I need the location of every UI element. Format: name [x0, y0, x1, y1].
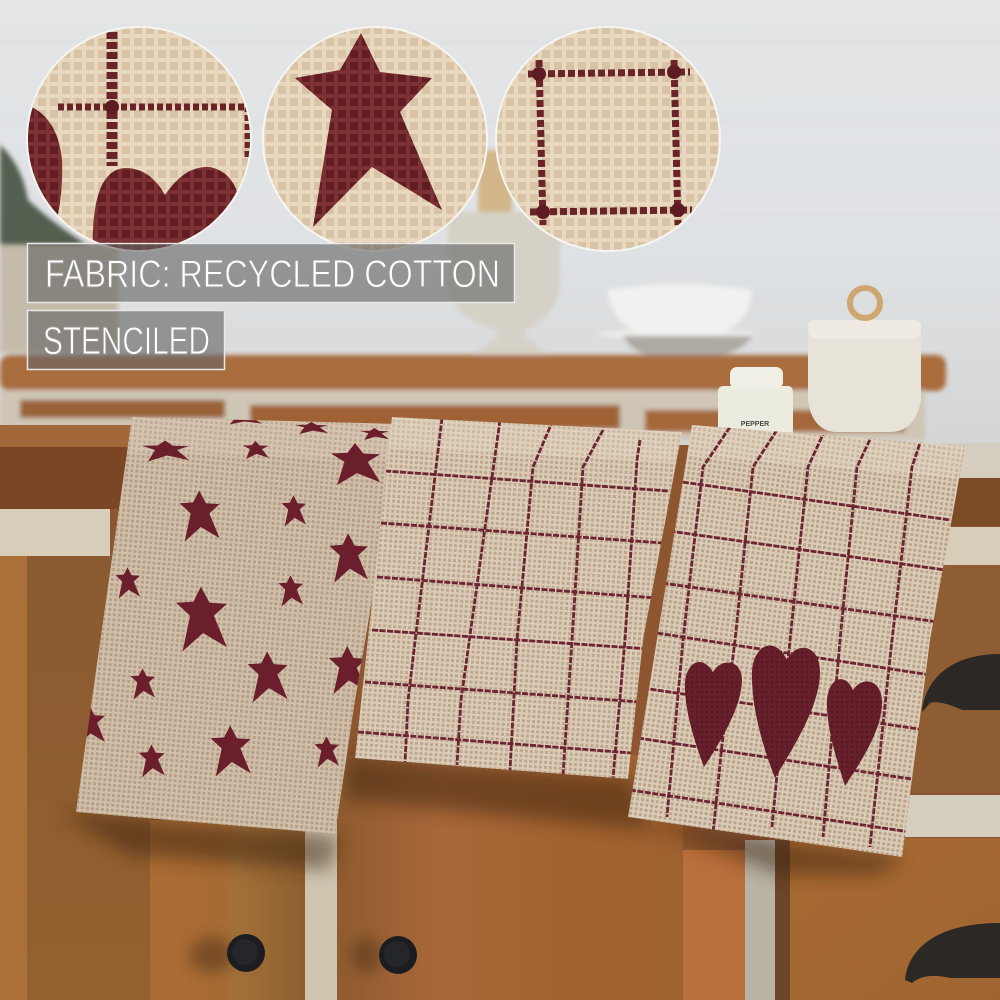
detail circle: check square [495, 26, 721, 252]
cream post left [305, 760, 337, 1000]
wooden shelf [0, 355, 946, 391]
cabinet hardware [190, 654, 1000, 983]
cup pull lower [905, 923, 1000, 983]
ceramic crock with utensils [448, 150, 560, 355]
cream rail [0, 509, 110, 556]
plant on shelf [0, 145, 88, 245]
blurred background shelf scene [0, 145, 946, 440]
counter top [0, 445, 1000, 1000]
cream drawer divider [905, 795, 1000, 837]
label: stenciled [28, 310, 224, 370]
lower right drawer [790, 838, 1000, 1000]
wall background [0, 0, 1000, 450]
detail circle: heart and check [26, 26, 252, 252]
label: stenciled: STENCILED [43, 320, 210, 363]
upper right drawer [912, 565, 1000, 793]
towel: plaid [350, 410, 690, 785]
left door panels [0, 556, 27, 1000]
label: fabric [28, 244, 514, 302]
centre door panel [337, 755, 683, 1000]
towel: plaid with hearts [620, 420, 970, 860]
large heart centre [752, 646, 820, 778]
wooden cabinet [0, 425, 1000, 1000]
towel: stars [76, 417, 392, 834]
towel shadows [60, 755, 905, 875]
pepper shaker [718, 367, 793, 436]
label: fabric: FABRIC: RECYCLED COTTON [45, 253, 500, 296]
detail circle: star [262, 26, 488, 252]
cream post right [745, 840, 775, 1000]
pepper shaker: PEPPER [741, 421, 769, 428]
stacked bowl and plate [597, 284, 757, 358]
cup pull upper [922, 654, 1000, 712]
woven basket [0, 245, 118, 353]
small heart left [685, 662, 742, 767]
cream rail under shelf [0, 390, 925, 440]
small heart right [827, 679, 882, 786]
lidded jar [808, 288, 921, 432]
round knob left [190, 934, 265, 973]
round knob right [350, 936, 417, 974]
